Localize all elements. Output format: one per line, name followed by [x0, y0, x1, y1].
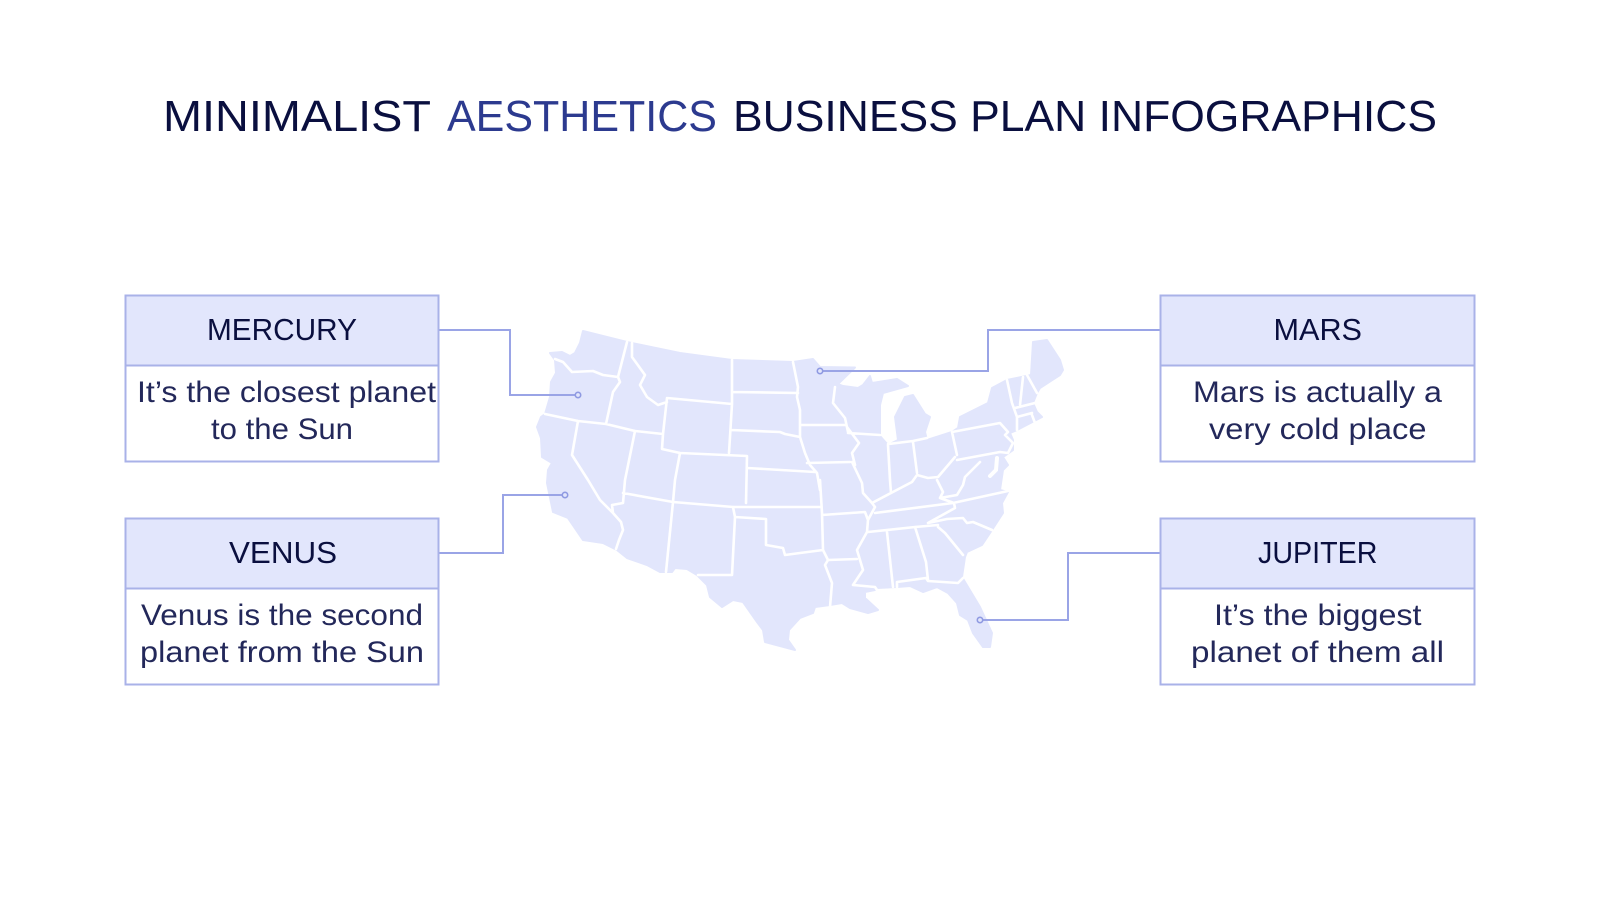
- panel: Venus: [126, 518, 438, 684]
- panel: Mars: Mars is actually a: [1193, 376, 1442, 409]
- title: MINIMALIST: [163, 92, 431, 141]
- panel: Mercury: MERCURY: [207, 312, 357, 347]
- panel: Jupiter: It’s the biggest: [1214, 599, 1422, 632]
- title: [163, 92, 1437, 141]
- panel: Venus: VENUS: [229, 535, 337, 570]
- title: AESTHETICS: [447, 92, 717, 141]
- panel: Mars: MARS: [1274, 312, 1362, 347]
- panel: Jupiter: JUPITER: [1258, 535, 1378, 570]
- map: United States: [537, 331, 1063, 650]
- panel: Venus: planet from the Sun: [140, 636, 424, 669]
- panel: Jupiter: [1160, 518, 1474, 684]
- panel: Venus: Venus is the second: [141, 599, 423, 632]
- panel: Mercury: It’s the closest planet: [137, 376, 437, 409]
- panel: Mercury: to the Sun: [211, 413, 353, 446]
- title: BUSINESS PLAN INFOGRAPHICS: [733, 92, 1437, 141]
- connector: Mars: [817, 330, 1160, 374]
- panel: Mars: very cold place: [1209, 413, 1426, 446]
- connector: Mercury: [438, 330, 581, 398]
- connector: Jupiter: [977, 553, 1160, 623]
- panel: Mercury: [126, 296, 438, 462]
- connector: Venus: [438, 492, 568, 553]
- panel: Jupiter: planet of them all: [1191, 636, 1444, 669]
- panel: Mars: [1160, 296, 1474, 462]
